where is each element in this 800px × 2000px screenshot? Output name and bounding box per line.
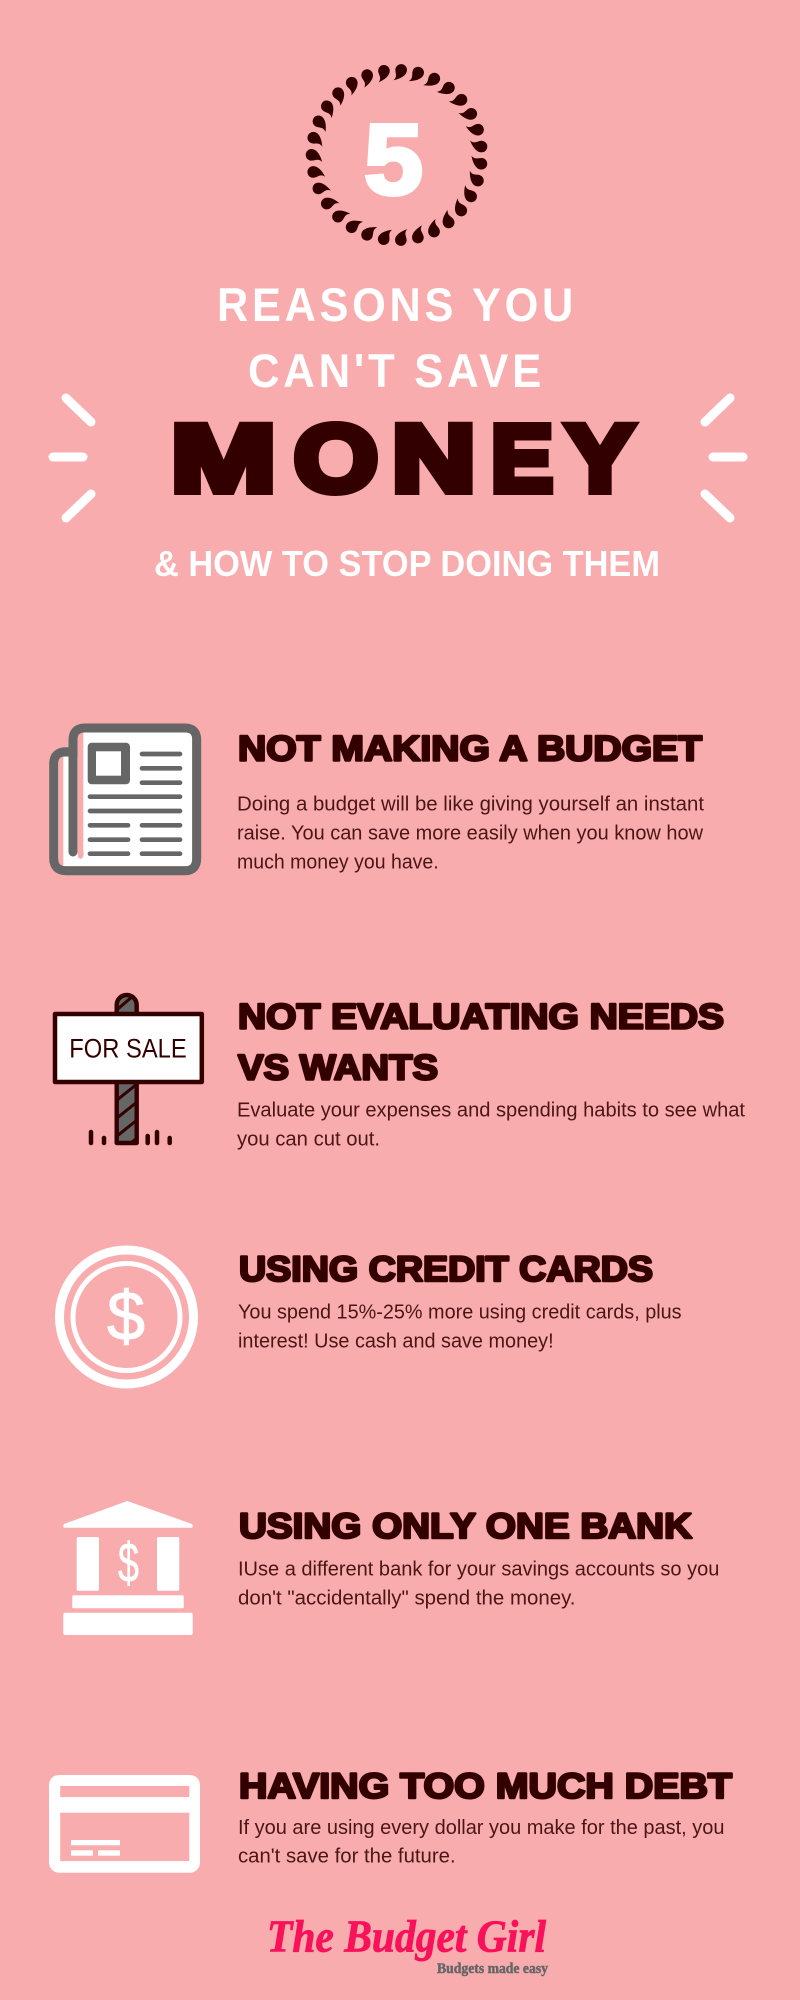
body text [238,1301,682,1352]
logo [267,1911,548,1977]
body text [237,1100,745,1151]
title [154,278,660,584]
icon: newspaper [54,728,197,871]
body text [238,1817,724,1868]
body text: interest! Use cash and save money! [238,1330,554,1352]
badge: number 5 in drop ring [306,64,488,246]
body text: Evaluate your expenses and spending habits to see what [237,1100,745,1122]
body text: Doing a budget will be like giving yourself an instant [237,794,704,816]
body text: don't "accidentally" spend the money. [238,1587,576,1609]
body text [238,1559,719,1609]
drop ring [306,64,488,246]
title word: money: O [294,406,378,512]
icon: dollar coin: $ [107,1277,145,1355]
icon: for sale sign [55,990,202,1158]
body text: you can cut out. [237,1129,380,1151]
section 2: needs vs wants [55,990,745,1158]
heading: HAVING TOO MUCH DEBT [239,1766,732,1806]
number 5: 5 [364,104,423,216]
icon: bank: $ [118,1531,139,1594]
body text: can't save for the future. [238,1846,456,1868]
section 5: having too much debt [49,1766,732,1873]
body text: IUse a different bank for your savings accounts so you [238,1559,719,1581]
heading: NOT MAKING A BUDGET [238,728,702,768]
body text: You spend 15%-25% more using credit cards, plus [238,1301,682,1323]
heading: NOT EVALUATING NEEDS [238,997,724,1037]
title word: money: Y [566,406,634,512]
body text [237,794,704,873]
body text: raise. You can save more easily when you know how [237,822,704,844]
heading line 2: VS WANTS [238,1048,438,1088]
title line: can't save: CAN'T SAVE [248,344,545,397]
title word: money: N [392,406,476,512]
heading: USING ONLY ONE BANK [239,1506,692,1546]
icon: left burst lines [53,398,91,518]
logo wordmark: The Budget Girl [267,1911,546,1962]
subtitle: & HOW TO STOP DOING THEM [154,543,660,584]
sign label: FOR SALE [69,1033,187,1063]
section 4: using only one bank [63,1501,719,1635]
icon: credit card [49,1775,200,1873]
icon: right burst lines [705,398,743,518]
section 1: not making a budget [54,728,704,873]
logo tagline: Budgets made easy [437,1961,548,1977]
section 3: using credit cards [60,1249,682,1384]
icon: dollar coin [60,1250,194,1384]
title word: money: E [491,406,553,512]
body text: If you are using every dollar you make for the past, you [238,1817,724,1839]
title word: money: M [171,406,276,512]
icon: bank [63,1501,193,1635]
body text: much money you have. [237,851,439,873]
title line: reasons you: REASONS YOU [217,278,577,331]
heading: USING CREDIT CARDS [239,1249,653,1289]
